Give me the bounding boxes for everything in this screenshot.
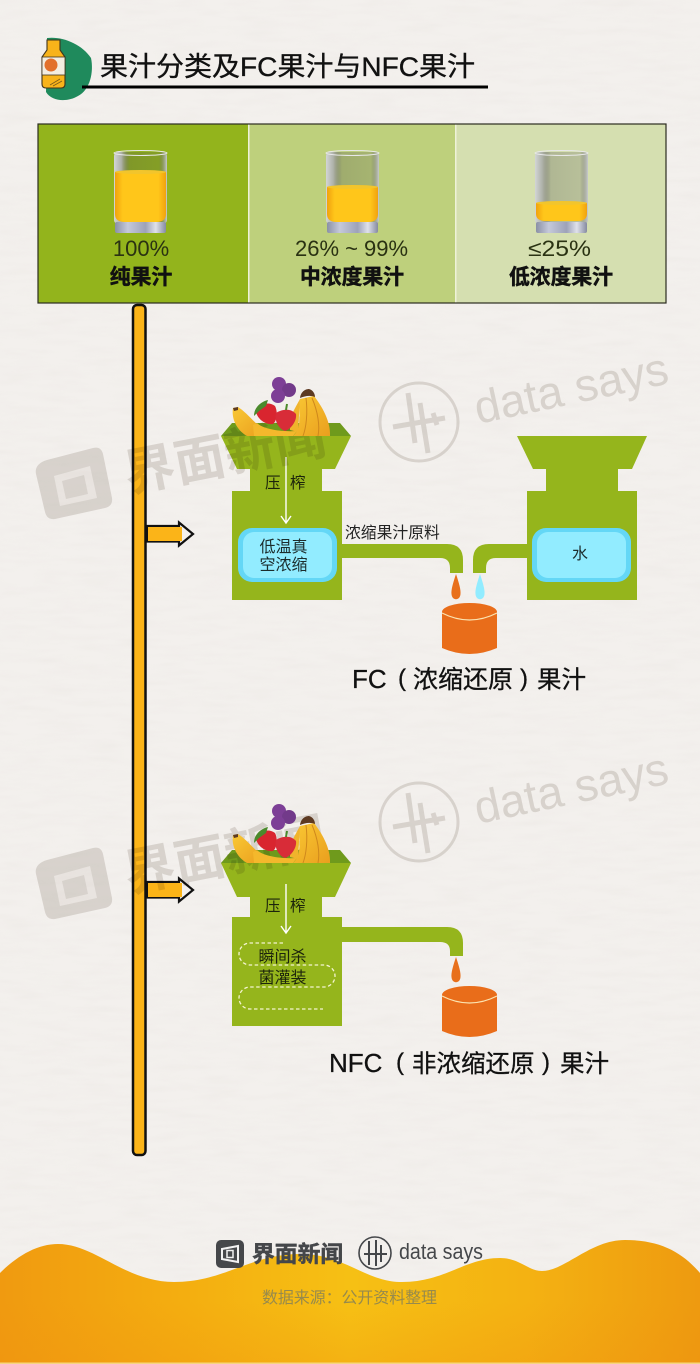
- watermark: upper: [36, 342, 673, 519]
- drop: water: [475, 574, 485, 599]
- machine: press: 榨: [290, 897, 306, 915]
- box: low temp vacuum concentration: 低温真: [259, 538, 308, 556]
- machine: press: [221, 423, 351, 600]
- arrow: to NFC process: [147, 878, 193, 902]
- press label: 压: [265, 475, 281, 492]
- watermark: lower: data says: [469, 742, 673, 834]
- icon: fruit pile (FC): [233, 377, 330, 436]
- icon: fruit pile (NFC): [233, 804, 330, 863]
- FC label: [352, 664, 586, 694]
- FC label: FC: [352, 664, 387, 694]
- icon: orange cup: [442, 986, 497, 1037]
- arrow: press down: [281, 457, 291, 523]
- FC label: (: [398, 665, 406, 692]
- icon: two-thirds glass: [326, 150, 379, 233]
- category: medium concentration: 中浓度果汁: [300, 266, 404, 289]
- panel: NFC process: [221, 850, 609, 1078]
- footer logo: data says: data says: [399, 1239, 483, 1264]
- watermark: upper: 界面新闻: [119, 408, 330, 503]
- category: low concentration: ≤25%: [528, 236, 591, 261]
- arrow: to FC process: [147, 522, 193, 546]
- footer logo: jiemian: 界面新闻: [252, 1241, 343, 1267]
- title block: [42, 38, 488, 100]
- label: flash sterilise and fill: 瞬间杀: [258, 948, 307, 966]
- box: low temp vacuum concentration: 空浓缩: [259, 556, 308, 574]
- source note: 数据来源：公开资料整理: [262, 1289, 437, 1307]
- FC label: 浓缩还原: [413, 666, 513, 694]
- press label: 压: [265, 898, 281, 915]
- NFC label: 非浓缩还原: [412, 1050, 534, 1078]
- machine: press: [221, 850, 351, 1026]
- title text: 果汁分类及FC果汁与NFC果汁: [100, 52, 475, 82]
- category: low concentration: 低浓度果汁: [509, 266, 613, 289]
- NFC label: ): [542, 1049, 550, 1076]
- machine: press: 榨: [290, 474, 306, 492]
- NFC label: NFC: [329, 1048, 382, 1078]
- machine: water tank: [517, 436, 647, 600]
- panel: FC process: [221, 423, 647, 694]
- category: low concentration: [509, 150, 613, 289]
- label: concentrate raw material: 浓缩果汁原料: [345, 524, 440, 542]
- category: pure juice: [110, 150, 172, 289]
- footer logo: data says: [359, 1237, 483, 1269]
- icon: juice bottle: [42, 38, 92, 100]
- NFC label: [329, 1048, 609, 1078]
- FC label: 果汁: [537, 666, 586, 694]
- NFC label: 果汁: [560, 1050, 609, 1078]
- watermark: upper: data says: [469, 342, 673, 434]
- box: water: 水: [572, 545, 588, 563]
- box: low temp vacuum concentration: [238, 528, 337, 582]
- icon: full glass: [114, 150, 167, 233]
- pipe: water: [473, 544, 527, 573]
- drop: juice: [451, 957, 461, 982]
- watermark: lower: [36, 742, 673, 919]
- footer logo: jiemian: [216, 1240, 343, 1268]
- arrow: press down: [281, 884, 291, 933]
- vertical timeline bar: [133, 305, 146, 1155]
- icon: low-level glass: [535, 150, 588, 233]
- footer wave: [0, 1240, 700, 1364]
- category: medium concentration: [295, 150, 408, 289]
- pipe: concentrate: [342, 544, 463, 573]
- box: water: [532, 528, 631, 582]
- category: pure juice: 纯果汁: [110, 266, 172, 289]
- NFC label: (: [396, 1049, 404, 1076]
- icon: orange cup: [442, 603, 497, 654]
- dashed sterilise path: [239, 943, 335, 1009]
- category: pure juice: 100%: [113, 236, 169, 261]
- FC label: ): [520, 665, 528, 692]
- pipe: NFC juice: [342, 927, 463, 956]
- label: flash sterilise and fill: [258, 948, 307, 987]
- panel: juice concentration categories: [38, 124, 666, 303]
- label: flash sterilise and fill: 菌灌装: [258, 969, 307, 987]
- watermark: lower: 界面新闻: [119, 808, 330, 903]
- drop: juice: [451, 574, 461, 599]
- category: medium concentration: 26% ~ 99%: [295, 236, 408, 261]
